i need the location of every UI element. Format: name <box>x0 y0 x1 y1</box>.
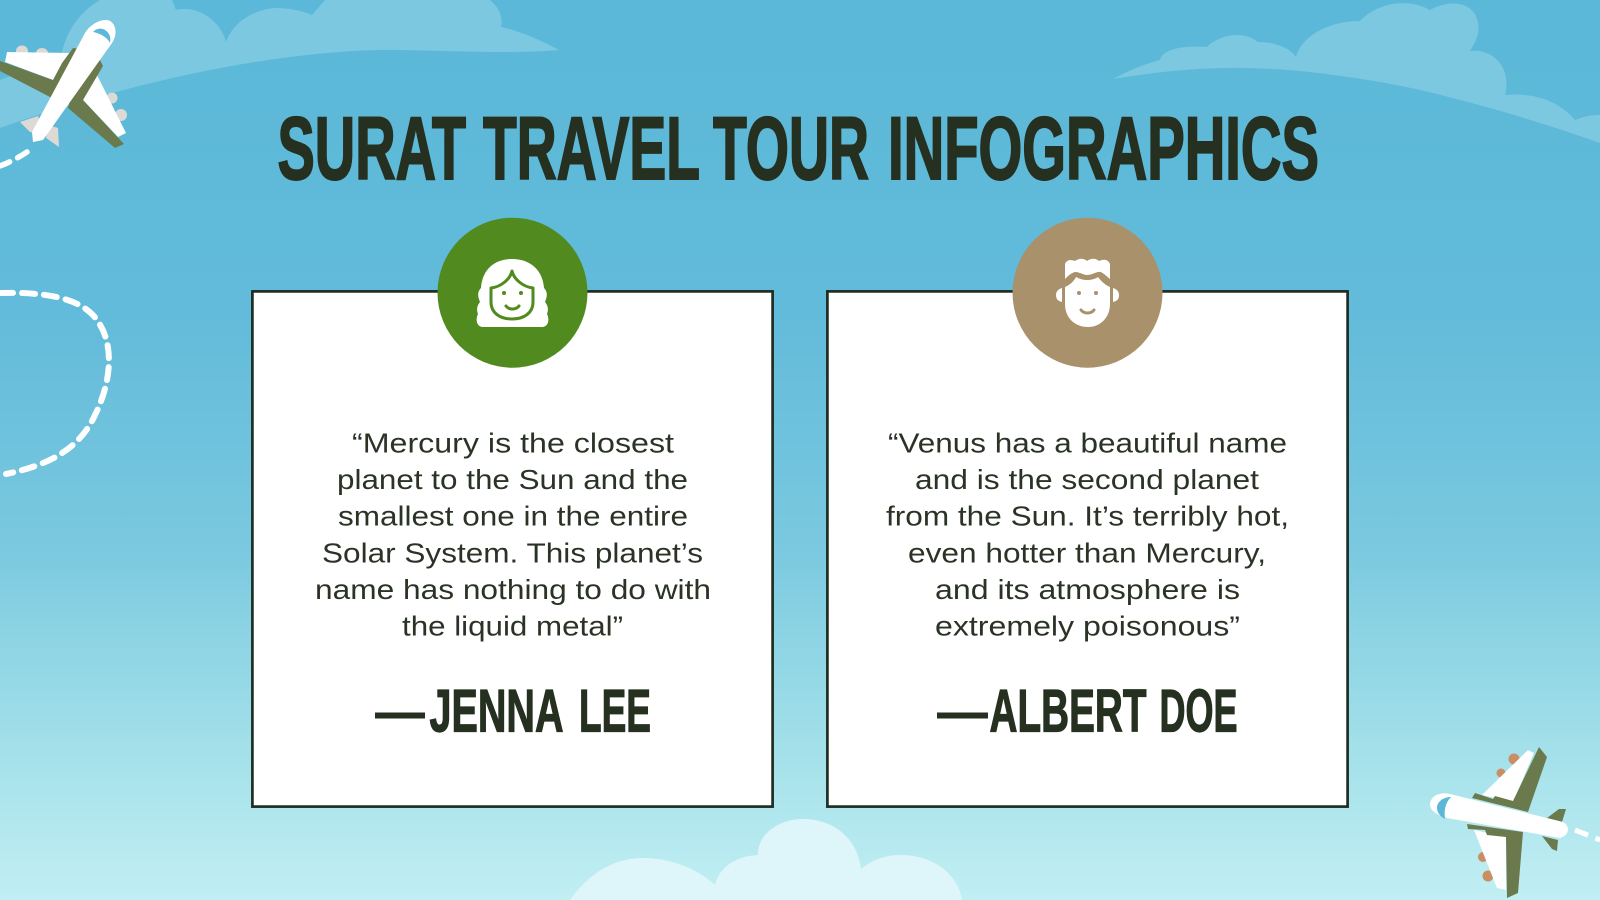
quote text: the liquid metal” <box>402 611 623 642</box>
title: SURAT <box>278 98 466 198</box>
card background <box>252 291 773 807</box>
panel: Jenna Lee testimonial <box>252 218 773 807</box>
panel: Albert Doe testimonial <box>827 218 1348 807</box>
name: JENNA <box>430 678 564 744</box>
quote text: “Venus has a beautiful name <box>888 427 1287 458</box>
name: — <box>937 678 988 744</box>
quote text: and is the second planet <box>915 464 1259 495</box>
quote text: planet to the Sun and the <box>337 464 688 495</box>
quote text: extremely poisonous” <box>935 611 1240 642</box>
quote text: and its atmosphere is <box>935 574 1240 605</box>
dashed trail: top left plane <box>0 152 27 166</box>
cloud: bottom centre <box>570 819 962 900</box>
quote text: from the Sun. It’s terribly hot, <box>886 501 1289 532</box>
icon: airplane top left <box>0 20 127 148</box>
card background <box>827 291 1348 807</box>
quote text <box>886 427 1289 642</box>
quote text: even hotter than Mercury, <box>908 537 1266 568</box>
quote text: “Mercury is the closest <box>352 427 674 458</box>
title: TRAVEL <box>483 98 700 198</box>
quote text <box>315 427 711 642</box>
icon: woman avatar <box>438 218 588 368</box>
quote text: smallest one in the entire <box>338 501 688 532</box>
cloud: top right <box>1113 3 1600 143</box>
name: LEE <box>579 678 651 744</box>
title <box>278 98 1319 198</box>
dashed flight path: left <box>0 293 109 474</box>
name: DOE <box>1160 678 1238 744</box>
cloud: top left <box>0 0 559 128</box>
icon: airplane bottom right <box>1430 747 1568 898</box>
icon: man avatar <box>1012 218 1162 368</box>
quote text: Solar System. This planet’s <box>322 537 703 568</box>
name: — <box>375 678 425 744</box>
name: ALBERT <box>990 678 1146 744</box>
quote text: name has nothing to do with <box>315 574 711 605</box>
title: TOUR <box>713 98 869 198</box>
title: INFOGRAPHICS <box>888 98 1319 198</box>
dashed trail: bottom right plane <box>1575 830 1600 840</box>
